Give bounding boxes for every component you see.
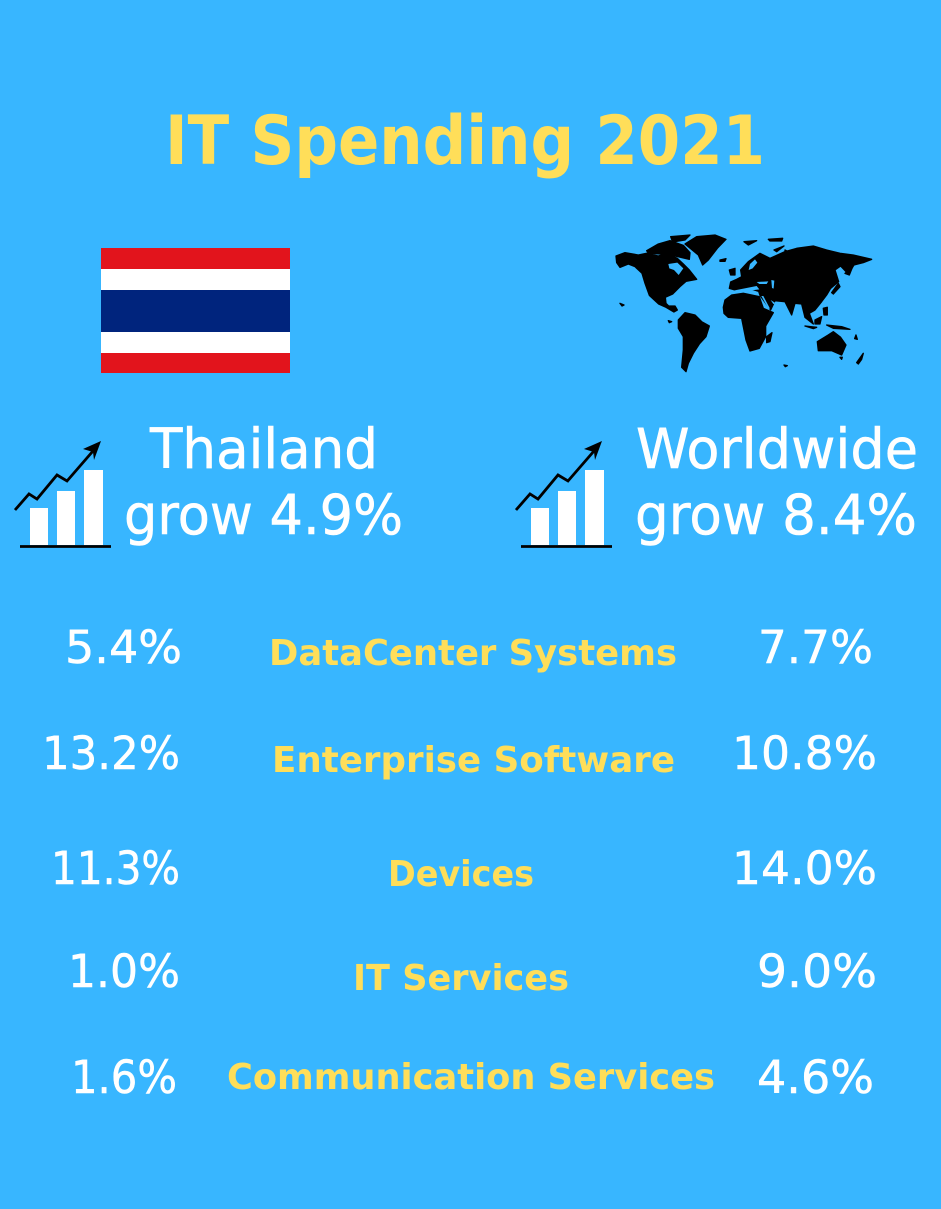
row: Communication Services: 4.6% (757, 1051, 874, 1104)
row: IT Services: 9.0% (757, 945, 877, 998)
row: DataCenter Systems: DataCenter Systems (269, 633, 677, 674)
row: Communication Services: 1.6% (71, 1051, 177, 1104)
row: DataCenter Systems: 7.7% (758, 621, 873, 674)
row: Devices (51, 842, 877, 895)
row: Enterprise Software (42, 727, 877, 781)
row: IT Services: IT Services (353, 958, 569, 999)
row: Devices: Devices (388, 854, 534, 895)
Thailand growth figure: grow 4.9% (124, 483, 403, 547)
Worldwide growth figure: grow 8.4% (635, 483, 917, 547)
row: Enterprise Software: Enterprise Software (272, 740, 675, 781)
row: DataCenter Systems: 5.4% (65, 621, 182, 674)
row: DataCenter Systems (65, 621, 873, 674)
Hudson Bay and inland seas (668, 259, 776, 309)
heading: Thailand: Thailand (149, 417, 378, 481)
row: IT Services (68, 945, 877, 999)
icon: Worldwide growth chart (516, 441, 612, 546)
icon: Thailand flag (101, 248, 290, 373)
row: IT Services: 1.0% (68, 945, 180, 998)
icon: Thailand growth chart (15, 441, 111, 546)
row: Devices: 11.3% (51, 842, 180, 895)
row: Devices: 14.0% (732, 842, 877, 895)
row: Communication Services (71, 1051, 874, 1104)
icon: world map (616, 235, 872, 372)
title: IT Spending 2021 (165, 102, 765, 181)
heading: Worldwide: Worldwide (636, 417, 918, 481)
row: Enterprise Software: 13.2% (42, 727, 180, 780)
row: Enterprise Software: 10.8% (732, 727, 877, 780)
row: Communication Services: Communication Services (227, 1057, 715, 1098)
